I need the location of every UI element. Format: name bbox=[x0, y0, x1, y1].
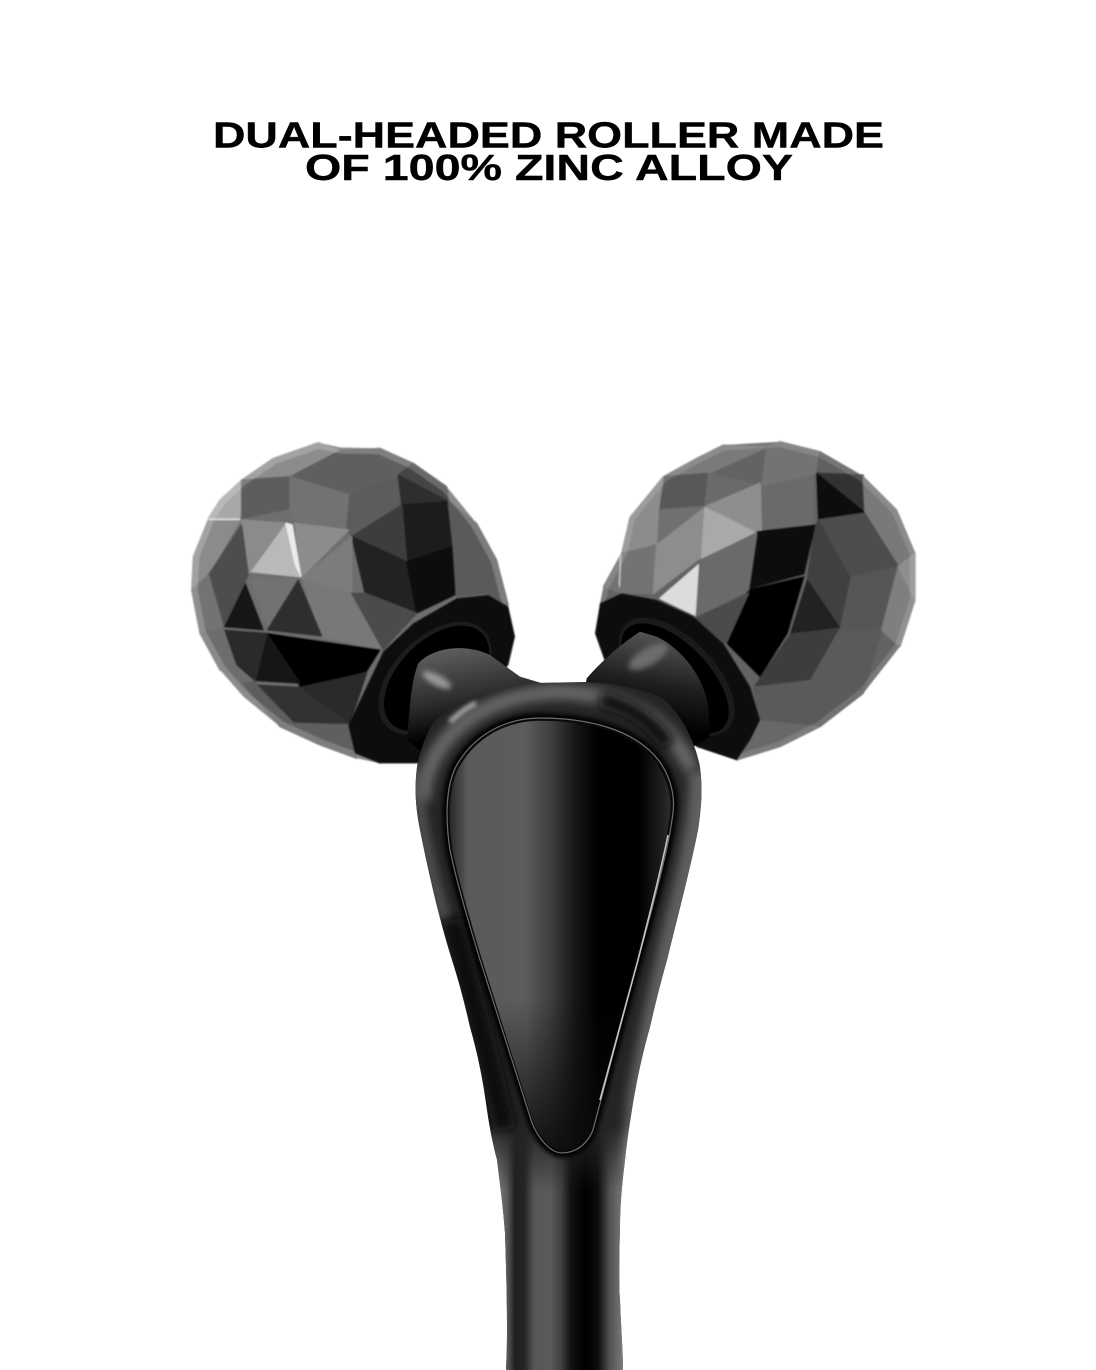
teardrop inset panel bbox=[447, 718, 674, 1153]
left faceted roller head bbox=[192, 443, 553, 763]
upper shoulder band bbox=[423, 692, 692, 800]
infographic canvas bbox=[190, 122, 916, 1370]
title bbox=[213, 114, 884, 188]
product: dual-headed facial roller bbox=[192, 442, 915, 1370]
right collar ring bbox=[595, 593, 760, 760]
left collar ring bbox=[348, 595, 515, 763]
right faceted roller head bbox=[580, 442, 915, 760]
right neck bbox=[580, 632, 710, 747]
title: OF 100% ZINC ALLOY bbox=[305, 147, 793, 188]
left neck bbox=[407, 648, 553, 753]
title: DUAL-HEADED ROLLER MADE bbox=[213, 114, 884, 156]
handle body bbox=[416, 682, 701, 1370]
